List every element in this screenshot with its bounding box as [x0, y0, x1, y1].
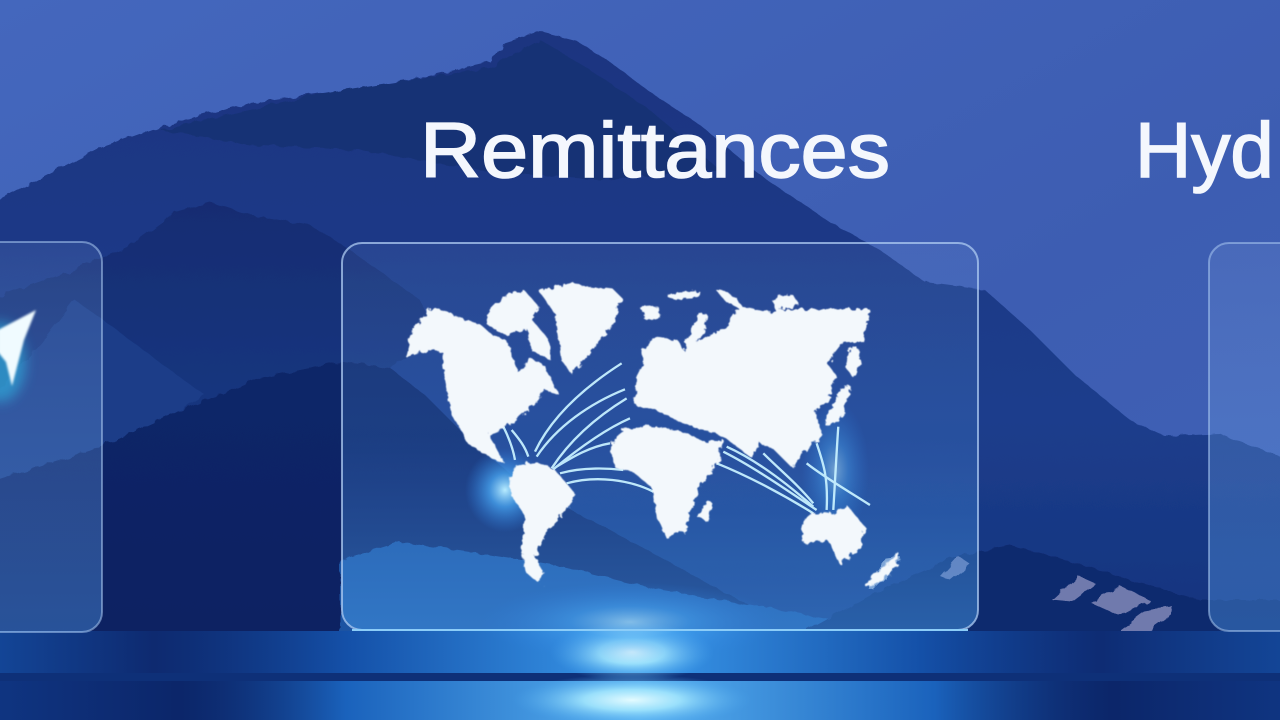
Novaya Zemlya: [718, 290, 740, 307]
Japan: [847, 348, 859, 375]
Iceland: [643, 308, 658, 318]
Scandinavia: [685, 315, 705, 350]
Eurasia: [637, 307, 868, 465]
New Zealand: [867, 555, 898, 585]
North America: [407, 308, 557, 462]
Svalbard: [668, 293, 698, 297]
Greenland: [542, 285, 620, 372]
Australia: [803, 507, 863, 562]
Arctic archipelago: [488, 292, 550, 357]
chart: remittance flow lines: [503, 363, 870, 513]
South America: [511, 464, 573, 582]
heading: partial next card title: Hyd: [1135, 106, 1274, 194]
snow patches: [868, 556, 1172, 644]
icon: paper plane: [0, 310, 36, 386]
heading: Remittances: Remittances: [420, 106, 890, 194]
Siberian islands: [773, 296, 797, 309]
Madagascar: [699, 502, 711, 519]
floor light band: [0, 622, 1280, 720]
panel: remittances glass card: [342, 243, 978, 662]
Africa: [612, 427, 722, 536]
chart: world map: [407, 285, 898, 585]
panel: right glass card: [1209, 243, 1280, 631]
panel: left glass card: [0, 242, 102, 632]
